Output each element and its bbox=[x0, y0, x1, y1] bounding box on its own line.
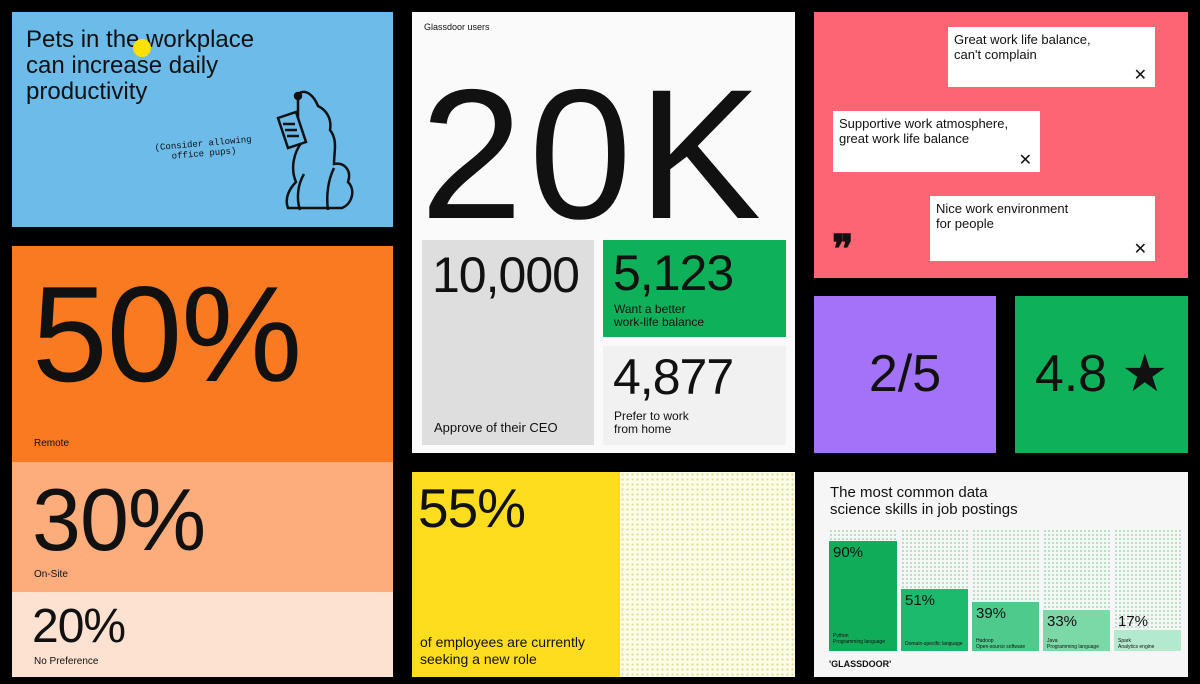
review card 2: Supportive work atmosphere, bbox=[839, 116, 1008, 131]
panel: 4.8 star bbox=[1015, 296, 1188, 453]
bar: domain: 51% bbox=[905, 592, 935, 609]
stat: 10,000 bbox=[422, 240, 594, 445]
panel: 20% no preference bbox=[12, 592, 393, 677]
bar: python: 90% bbox=[833, 544, 863, 561]
panel: 55% seeking new role: 55% bbox=[418, 477, 525, 539]
big number 20K: 20K bbox=[420, 52, 767, 258]
panel: 30% on-site bbox=[12, 462, 393, 592]
bar: java bbox=[1043, 610, 1110, 651]
panel: 2/5 bbox=[814, 296, 996, 453]
heading: pets bbox=[26, 26, 254, 105]
panel: glassdoor users: Glassdoor users bbox=[424, 22, 490, 32]
bar: domain: Domain-specific language bbox=[905, 641, 963, 647]
stat: 5,123: work-life balance bbox=[614, 315, 704, 329]
stat: 4,877: 4,877 bbox=[613, 349, 733, 405]
review card 1: ✕ bbox=[1134, 67, 1147, 84]
bar chart: 17% bbox=[1118, 613, 1148, 630]
panel: skills chart bbox=[814, 472, 1188, 677]
heading: pets: Pets in the workplace bbox=[26, 26, 254, 53]
note: office pups) bbox=[171, 146, 237, 162]
panel: 2/5: 2/5 bbox=[869, 345, 941, 403]
bar: hadoop: Open-source software bbox=[976, 644, 1025, 650]
stat: 5,123: 5,123 bbox=[613, 245, 733, 301]
review card 2: ✕ bbox=[1019, 152, 1032, 169]
panel: 20% no preference: 20% bbox=[32, 600, 125, 653]
panel: 55% seeking new role: seeking a new role bbox=[420, 651, 537, 667]
review card 2 bbox=[833, 111, 1040, 172]
review card 3: ✕ bbox=[1134, 241, 1147, 258]
panel: 50% remote: Remote bbox=[34, 438, 69, 449]
panel: 20% no preference: No Preference bbox=[34, 656, 98, 667]
review card 1: Great work life balance, bbox=[954, 32, 1091, 47]
review card 3 bbox=[930, 196, 1155, 261]
bar: spark bbox=[1114, 630, 1181, 651]
review card 3: for people bbox=[936, 216, 994, 231]
icon: quote: ❞ bbox=[832, 228, 854, 272]
stat: 4,877: Prefer to work bbox=[614, 409, 689, 423]
bar: hadoop: Hadoop bbox=[976, 638, 994, 644]
panel: reviews bbox=[814, 12, 1188, 278]
review card 2: great work life balance bbox=[839, 131, 969, 146]
bar: python: Python bbox=[833, 633, 849, 639]
stat: 5,123: Want a better bbox=[614, 302, 686, 316]
panel: glassdoor users bbox=[412, 12, 795, 453]
stat: 10,000: 10,000 bbox=[432, 247, 579, 303]
panel: skills chart: science skills in job postings bbox=[830, 501, 1018, 518]
stat: 4,877: from home bbox=[614, 422, 671, 436]
panel: 4.8 star: 4.8 ★ bbox=[1035, 345, 1168, 403]
stat: 10,000: Approve of their CEO bbox=[434, 420, 558, 435]
bar: domain bbox=[901, 589, 968, 651]
stat: 5,123 bbox=[603, 240, 786, 337]
bar: spark: Spark bbox=[1118, 638, 1131, 644]
note: (Consider allowing bbox=[154, 135, 252, 153]
stat: 4,877 bbox=[603, 346, 786, 445]
panel: skills chart: The most common data bbox=[830, 484, 988, 501]
bar: spark: Analytics engine bbox=[1118, 644, 1154, 650]
panel: 50% remote bbox=[12, 246, 393, 462]
note bbox=[154, 135, 252, 162]
panel: 55% seeking new role: of employees are currently bbox=[420, 634, 585, 650]
panel: 30% on-site: On-Site bbox=[34, 569, 68, 580]
panel: 30% on-site: 30% bbox=[32, 470, 205, 569]
panel: pets bbox=[12, 12, 393, 227]
bar: java: Programming language bbox=[1047, 644, 1099, 650]
bar: python: Programming language bbox=[833, 639, 885, 645]
panel: 50% remote: 50% bbox=[32, 258, 301, 410]
yellow dot bbox=[133, 39, 151, 57]
panel: 55% seeking new role bbox=[412, 472, 795, 677]
review card 3: Nice work environment bbox=[936, 201, 1068, 216]
review card 1 bbox=[948, 27, 1155, 87]
heading: pets: productivity bbox=[26, 78, 147, 105]
bar: java: 33% bbox=[1047, 613, 1077, 630]
bar: hadoop bbox=[972, 602, 1039, 651]
icon: dog bbox=[276, 90, 354, 210]
bar chart bbox=[829, 530, 1181, 651]
bar: java: Java bbox=[1047, 638, 1058, 644]
bar: python bbox=[829, 541, 897, 651]
logo: 'GLASSDOOR' bbox=[829, 659, 891, 669]
bar: hadoop: 39% bbox=[976, 605, 1006, 622]
review card 1: can't complain bbox=[954, 47, 1037, 62]
heading: pets: can increase daily bbox=[26, 52, 218, 79]
